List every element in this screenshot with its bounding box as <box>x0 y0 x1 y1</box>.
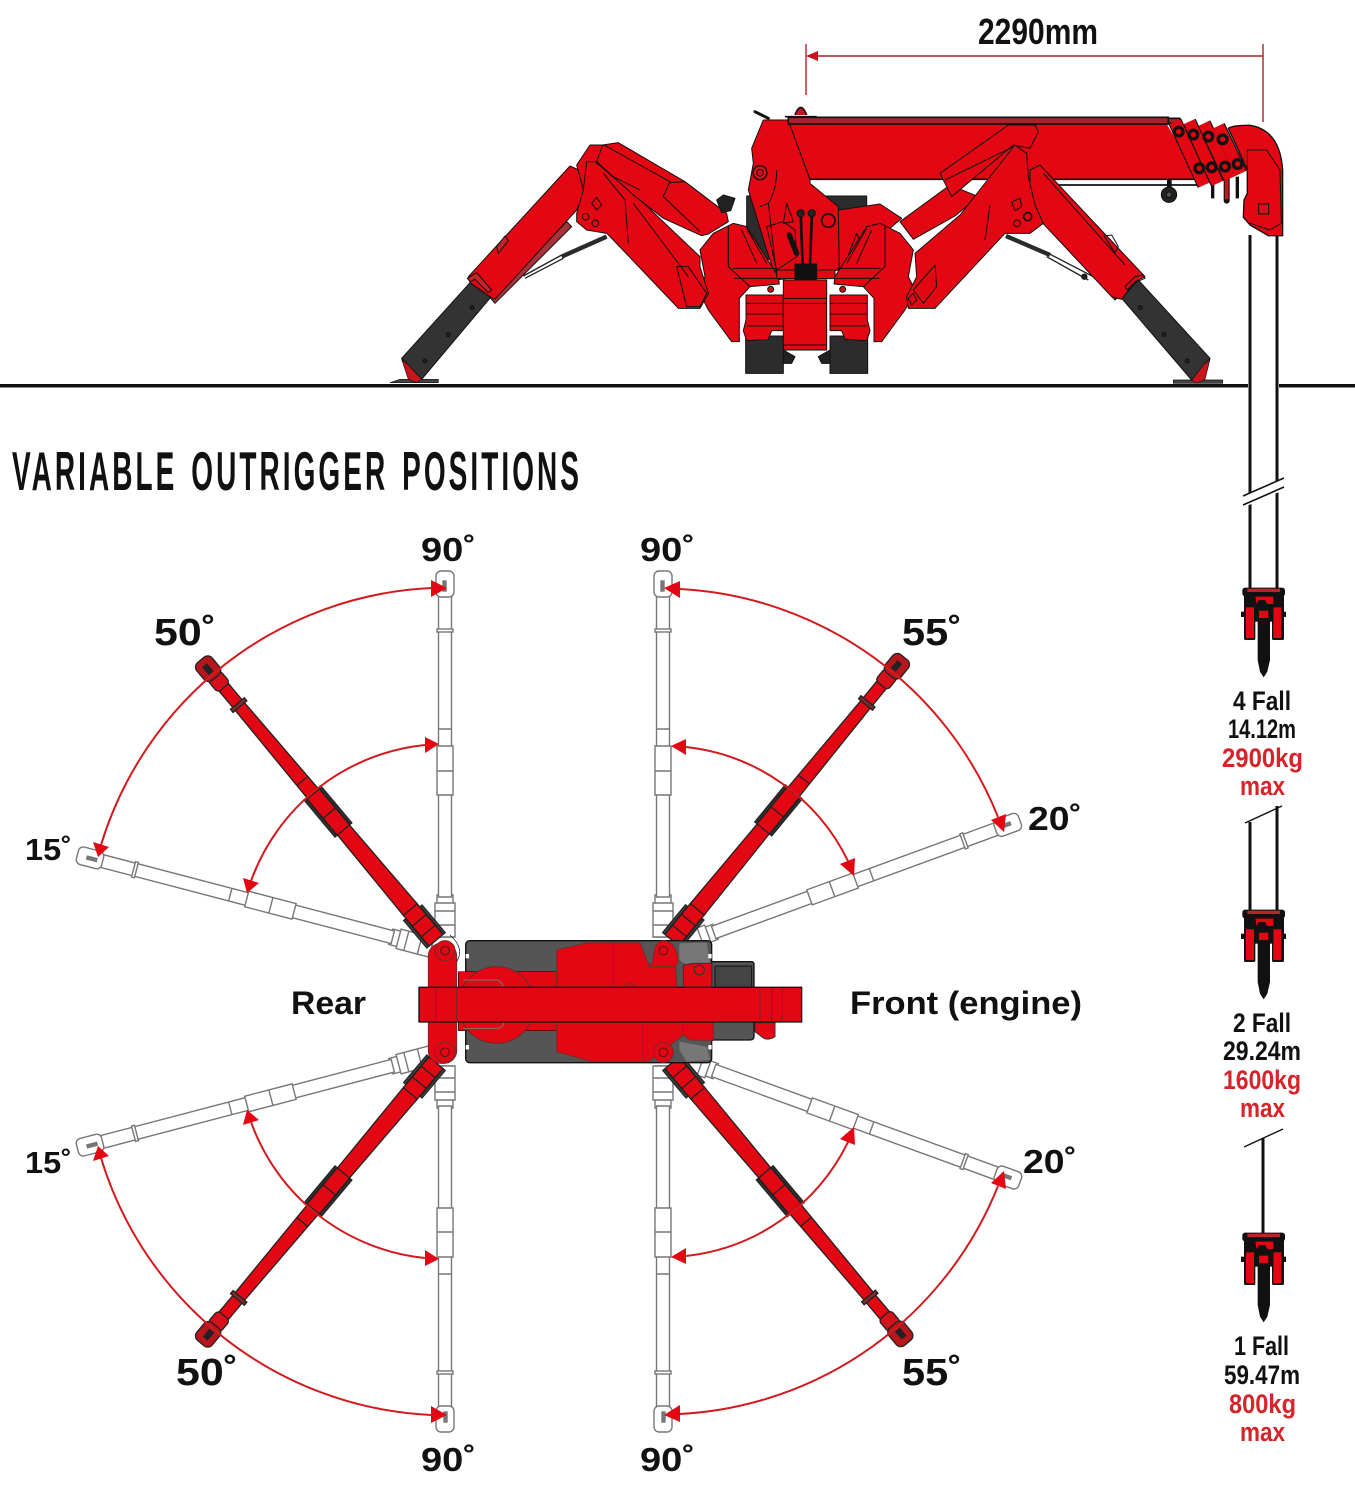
load text: 4 fall: 14.12m <box>1228 714 1296 744</box>
angle labels: 90˚ <box>421 1441 476 1478</box>
angle labels: 90˚ <box>640 1441 695 1478</box>
dimension: boom reach: 2290mm <box>978 11 1098 52</box>
angle labels: 50˚ <box>176 1352 238 1394</box>
plan view: ghost outrigger positions <box>75 571 1024 1432</box>
rope block: 1 fall <box>1241 1129 1286 1322</box>
side elevation: crawler crane <box>390 107 1283 383</box>
angle labels: 55˚ <box>902 1352 962 1394</box>
angle labels: 55˚ <box>902 612 962 654</box>
angle labels: 90˚ <box>421 531 476 568</box>
load text: 1 fall: 1 Fall <box>1234 1331 1289 1361</box>
ground line <box>0 384 1355 388</box>
load text: 2 fall: 29.24m <box>1223 1036 1301 1066</box>
plan view: red outrigger positions <box>192 650 917 1351</box>
label: rear: Rear <box>291 985 366 1021</box>
load text: 1 fall: 59.47m <box>1224 1360 1300 1390</box>
load text: 4 fall: max <box>1240 771 1285 801</box>
angle labels: 20˚ <box>1028 800 1082 837</box>
angle labels: 15˚ <box>25 832 72 867</box>
load text: 2 fall <box>1223 1008 1301 1123</box>
load text: 2 fall: 2 Fall <box>1233 1008 1291 1038</box>
load text: 4 fall: 4 Fall <box>1233 686 1291 716</box>
machine back parts and left leg <box>390 107 1180 383</box>
label: front engine: Front (engine) <box>850 985 1082 1021</box>
dimension: boom reach <box>806 11 1263 122</box>
load text: 1 fall: max <box>1240 1417 1285 1447</box>
plan view: machine body <box>419 935 802 1063</box>
rope block: 2 fall <box>1241 806 1286 999</box>
load text: 1 fall: 800kg <box>1229 1389 1296 1419</box>
load text: 2 fall: max <box>1240 1093 1285 1123</box>
angle labels: 20˚ <box>1023 1143 1077 1180</box>
title: VARIABLE OUTRIGGER POSITIONS <box>12 440 582 502</box>
boom and right leg <box>788 121 1283 383</box>
load text: 2 fall: 1600kg <box>1223 1065 1301 1095</box>
rope block: 4 fall <box>1240 235 1286 677</box>
load text: 1 fall <box>1224 1331 1300 1447</box>
boom top rail <box>788 117 1168 124</box>
angle labels: 15˚ <box>25 1145 72 1180</box>
plan view: angle arcs and arrows <box>93 580 1006 1423</box>
left leg and cylinder <box>390 143 735 383</box>
angle labels: 90˚ <box>640 531 695 568</box>
load text: 4 fall <box>1222 686 1303 801</box>
angle labels <box>25 531 1082 1478</box>
angle labels: 50˚ <box>154 612 216 654</box>
load text: 4 fall: 2900kg <box>1222 743 1303 773</box>
